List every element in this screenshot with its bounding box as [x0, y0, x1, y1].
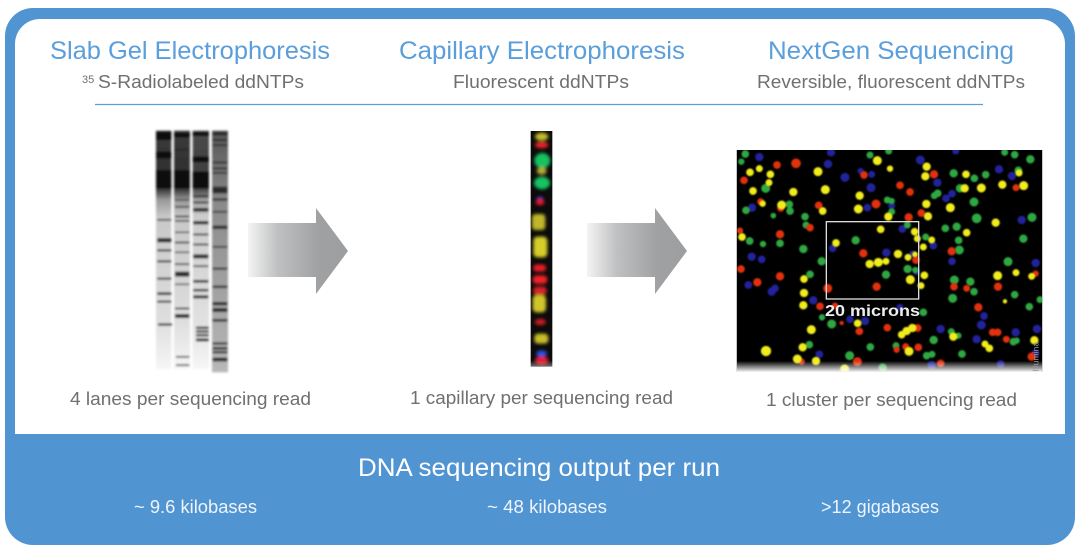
caption: cluster: 1 cluster per sequencing read — [766, 390, 1017, 410]
red clusters — [737, 159, 1038, 367]
column heading: nextgen — [757, 37, 1025, 92]
bottom fade — [737, 361, 1042, 372]
column heading: capillary — [399, 37, 685, 92]
column heading: capillary: Capillary Electrophoresis — [399, 37, 685, 65]
column heading: slab gel: 35 — [82, 74, 94, 86]
slab gel image — [156, 131, 228, 372]
green clusters — [739, 148, 1043, 371]
column heading: capillary: Fluorescent ddNTPs — [453, 72, 629, 92]
output value: slab gel: ~ 9.6 kilobases — [134, 497, 257, 517]
white content panel — [15, 19, 1065, 434]
column heading: slab gel — [50, 37, 330, 92]
column heading: nextgen: Reversible, fluorescent ddNTPs — [757, 72, 1025, 92]
output value: capillary: ~ 48 kilobases — [487, 497, 607, 517]
blue clusters — [745, 148, 1041, 369]
column heading: nextgen: NextGen Sequencing — [768, 37, 1014, 65]
column heading: slab gel: S-Radiolabeled ddNTPs — [98, 72, 304, 92]
watermark: Illumina — [1031, 342, 1041, 372]
column heading: slab gel: Slab Gel Electrophoresis — [50, 37, 330, 65]
nextgen cluster image — [737, 148, 1043, 373]
20 microns label: 20 microns — [825, 303, 920, 320]
caption: lanes: 4 lanes per sequencing read — [70, 389, 311, 409]
capillary image — [530, 131, 553, 375]
caption: capillary: 1 capillary per sequencing read — [410, 388, 673, 408]
yellow clusters — [739, 157, 1038, 373]
output value: nextgen: >12 gigabases — [821, 497, 939, 517]
arrow 1 — [248, 208, 348, 294]
arrow 2 — [587, 208, 687, 294]
output heading: DNA sequencing output per run — [358, 454, 720, 482]
lane bands — [157, 132, 227, 366]
20 micron box — [826, 222, 919, 299]
